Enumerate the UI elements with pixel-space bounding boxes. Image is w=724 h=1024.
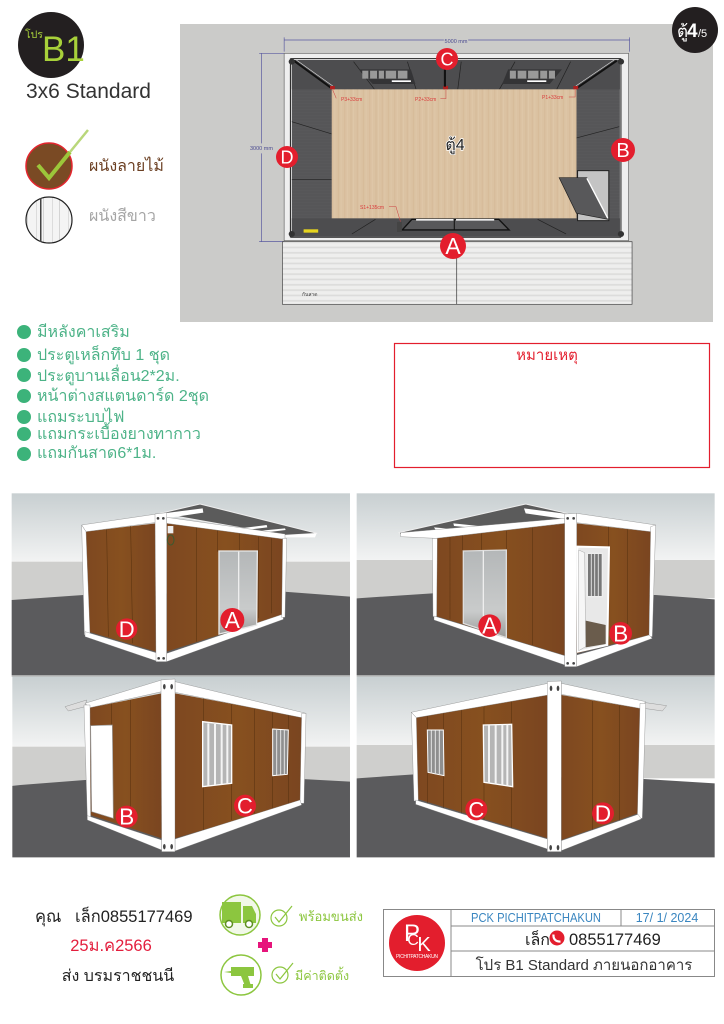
frame [284,53,629,241]
lights and annotations [330,86,335,89]
icon: truck [220,895,260,935]
badge: unit 4 of 5 [672,7,718,53]
feature list: ประตูบานเลื่อน2*2ม. [37,364,180,386]
windows [359,69,562,84]
icon: drill [221,955,261,995]
panel: floor plan: กันสาด [302,292,318,298]
option: white wall [26,197,156,243]
panel: view back right: D [595,800,611,826]
panel: view front right: B [613,620,628,646]
option: white wall: ผนังสีขาว [89,207,156,225]
feature list: แถมระบบไฟ [37,407,124,426]
feature list: ประตูเหล็กทึบ 1 ชุด [37,344,170,365]
marker A: A [445,233,461,259]
panel: view back left [12,677,350,857]
badge: unit 4 of 5: 4 [687,21,698,42]
badge: unit 4 of 5: ตู้ [677,22,688,42]
contact text [35,906,193,985]
dimension labels: 5000 mm [445,39,468,45]
contact text: คุณ [35,908,61,927]
panel: floor plan: ตู้4 [445,136,465,155]
panel: floor plan: P2+33cm [415,97,436,103]
awning [282,242,632,304]
marker D [276,146,298,168]
badge: promo B1 [18,12,85,78]
sliding door [402,219,509,230]
panel: view back right [357,677,715,857]
title block: โปร B1 Standard ภายนอกอาคาร [476,956,692,974]
title block [384,910,714,976]
interior walls [292,60,620,237]
title block: เล็ก [525,929,550,949]
marker B: B [616,140,630,162]
panel: view front left: A [225,607,241,633]
title block: PCK PICHITPATCHAKUN [471,911,601,925]
marker A [440,233,466,259]
ready to ship label [271,906,363,926]
logo: P [404,920,420,947]
panel: view front right [357,493,715,677]
panel: floor plan: S1+135cm [360,205,384,211]
steel door [578,171,609,221]
note box: หมายเหตุ [516,347,578,365]
title block: 17/ 1/ 2024 [636,911,698,925]
badge: unit 4 of 5: /5 [698,28,707,40]
panel: floor plan [180,24,713,322]
panel: view front left [12,493,350,677]
panel: view back left: C [237,794,253,819]
panel: view back left: B [119,804,134,830]
logo: K [417,934,431,956]
badge: promo B1: โปร [25,28,43,41]
panel: floor plan: P3+33cm [341,97,362,103]
icon: phone [550,930,564,946]
badge: promo B1: B1 [42,30,85,69]
floor [332,89,577,218]
marker B [611,138,635,162]
icon: plus [258,938,272,952]
title block: 0855177469 [569,931,661,949]
marker D: D [280,148,294,168]
corner fittings [289,59,624,237]
contact text: ส่ง บรมราชชนนี [62,967,174,985]
feature list: แถมกันสาด6*1ม. [37,445,156,462]
heading: size: 3x6 Standard [26,80,151,103]
panel: view front right: A [482,613,498,639]
logo: C [407,932,419,949]
feature list [17,323,209,462]
option: wood wall: ผนังลายไม้ [89,156,164,175]
feature list: มีหลังคาเสริม [37,323,130,341]
contact text: เล็ก0855177469 [75,906,193,926]
installation fee label [272,963,349,983]
installation fee label: มีค่าติดตั้ง [295,966,349,983]
ready to ship label: พร้อมขนส่ง [299,909,363,924]
marker C: C [440,50,454,70]
contact text: 25ม.ค2566 [70,937,152,955]
panel: floor plan: 3000 mm [250,146,273,152]
feature list: หน้าต่างสแตนดาร์ด 2ชุด [37,386,209,406]
feature list: แถมกระเบื้องยางทากาว [37,422,201,443]
panel: view back right: C [468,797,484,822]
panel: view front left: D [119,617,135,642]
logo [389,915,445,971]
marker C [436,48,458,70]
logo: PICHITPATCHAKUN [396,954,438,960]
note box [394,344,710,468]
panel: floor plan: P1+33cm [542,95,563,101]
option: wood wall [26,130,164,189]
dimension lines [259,37,630,242]
